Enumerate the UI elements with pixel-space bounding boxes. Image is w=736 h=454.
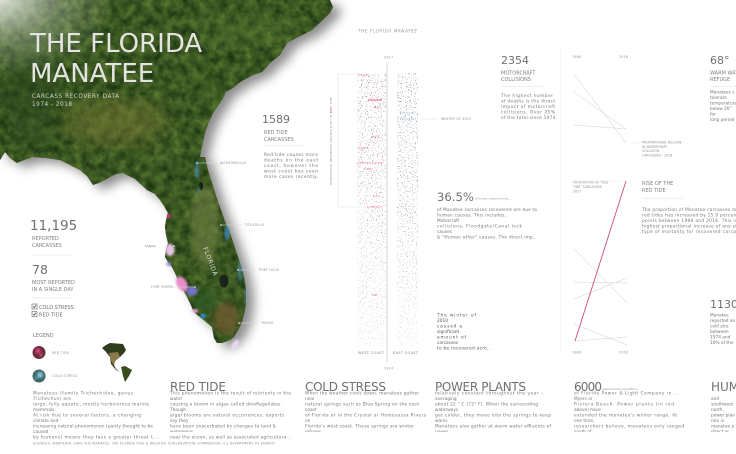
divider between stats and slopegraphs — [560, 45, 562, 355]
subtitle: CARCASS RECOVERY DATA — [32, 94, 119, 100]
chart: decline in watercraft slopegraph: COLLISION — [642, 149, 660, 153]
section: 6000: one time, — [574, 418, 594, 424]
section: cold stress: near — [305, 396, 315, 402]
text: rise of the red tide — [641, 181, 736, 235]
annotation: increasing red tide deaths bracket: INCREASING REPORTED DEATHS DUE TO RED TIDE — [329, 97, 333, 185]
stat: cold stress deaths: 10% of the — [710, 340, 734, 346]
map labels — [144, 161, 279, 325]
section: red tide: RED TIDE — [170, 380, 226, 394]
stat: red tide carcasses: Red tide causes more — [264, 152, 318, 158]
section: power plants: get colder, they move into the springs to keep — [435, 412, 551, 418]
small page heading: THE FLORIDA MANATEE — [358, 28, 417, 34]
stat: red tide carcasses — [262, 113, 318, 180]
stat: motorcraft collisions: The highest number — [500, 93, 553, 99]
stat: human causes: & "Human other" causes. The direct imp.. — [437, 234, 536, 240]
section: power plants — [435, 380, 551, 435]
filter checkboxes: COLD STRESS — [39, 305, 74, 311]
section: 6000: 6000 — [574, 380, 602, 394]
stat: motorcraft collisions: of the total since 1974. — [501, 115, 557, 121]
section: 6000: Riviera Beach. Power plants (in red — [574, 402, 674, 408]
stat: red tide carcasses: deaths on the east — [264, 158, 318, 164]
title: THE FLORIDA — [29, 29, 202, 59]
stat: reported carcasses: REPORTED — [32, 236, 59, 242]
stat: most reported in a single day: MOST REPORTED — [32, 280, 75, 286]
section: power plants: power — [435, 429, 449, 435]
section: cold stress: of Florida or in the Crystal or Homosassa Rivers — [305, 412, 427, 418]
stat: cold stress deaths: between — [710, 329, 729, 335]
section: cold stress: Florida's west coast. These springs are winter — [305, 424, 414, 430]
stat: red tide carcasses: RED TIDE — [264, 130, 288, 136]
title: MANATEE — [30, 59, 154, 89]
map: southeastern United States and Florida — [0, 0, 340, 350]
chart: rise of red tide slopegraph: TIDE" CARCASSES — [572, 185, 602, 189]
stat: warm water refuge — [710, 54, 736, 123]
stat: warm water refuge: for — [710, 112, 716, 118]
map labels: FORT MYERS — [151, 285, 173, 289]
stat: cold stress deaths: cold stre — [710, 324, 729, 330]
section: 6000: researchers believe, manatees only ranged — [574, 424, 684, 430]
section: 6000: (approximate population) — [602, 387, 638, 391]
filter checkboxes: RED TIDE — [39, 312, 63, 318]
intro text: large, fully aquatic, mostly herbivorous marine — [33, 402, 149, 408]
intro text: climate and — [33, 418, 59, 424]
stat: human causes: collisions, Floodgate/Canal lock — [437, 224, 522, 230]
map labels: TITUSVILLE — [244, 223, 264, 227]
chart: decline in watercraft slopegraph: 2016 — [619, 55, 628, 59]
section: red tide: say they — [170, 418, 189, 424]
section: 6000: south of — [574, 429, 592, 435]
legend: COLD STRESS — [52, 374, 77, 378]
section: power plants: averaging — [435, 396, 457, 402]
section: human: power plan — [711, 412, 735, 418]
stat: human causes: of Manatee carcasses recovered are due to — [437, 207, 537, 213]
section: cold stress: refuges — [305, 429, 322, 435]
map labels: PORT LUCIE — [259, 268, 279, 272]
intro text: mammals. — [33, 407, 56, 413]
section: red tide: have been exacerbated by changes to land & — [170, 424, 277, 430]
section: 6000 — [574, 380, 684, 435]
stat: warm water refuge: long period — [710, 117, 735, 123]
intro text — [33, 390, 158, 440]
stat: reported carcasses: CARCASSES — [32, 243, 62, 249]
stat: motorcraft collisions: impact of motorcraft — [501, 104, 555, 110]
chart: decline in watercraft slopegraph — [572, 55, 682, 157]
legend — [32, 333, 77, 382]
text: winter of 2010 note: The winter of — [436, 312, 476, 318]
stat: motorcraft collisions: COLLISIONS — [501, 77, 531, 83]
stat: motorcraft collisions — [500, 54, 557, 121]
legend: RED TIDE — [52, 351, 69, 355]
stat: motorcraft collisions: 2354 — [501, 54, 529, 67]
chart: rise of red tide slopegraph: 1986 — [572, 350, 581, 354]
text: winter of 2010 note — [436, 312, 490, 352]
chart: daily carcass scatter by coast: 1974 — [384, 366, 393, 370]
intro text: caused — [33, 429, 49, 435]
text: winter of 2010 note: 2010 — [437, 318, 448, 324]
intro text: At risk due to several factors, a changing — [33, 412, 141, 418]
section: power plants: relatively constant throughout the year – — [435, 390, 543, 396]
annotation: increasing red tide deaths bracket — [329, 74, 357, 207]
map labels: JACKSONVILLE — [219, 161, 246, 165]
stat: most reported in a single day: IN A SINGLE DAY — [32, 287, 74, 293]
chart: daily carcass scatter by coast: WEST COAST — [358, 351, 385, 355]
chart: decline in watercraft slopegraph: CARCASSES - 2016 — [642, 153, 672, 157]
stat: motorcraft collisions: collisions. Over 25% — [501, 110, 555, 116]
text: rise of the red tide: RED TIDE — [642, 188, 666, 194]
stat: motorcraft collisions: of deaths is the direct — [501, 98, 555, 104]
chart: rise of red tide slopegraph: 2016 — [619, 350, 628, 354]
map labels: FLORIDA — [201, 246, 219, 277]
stat: motorcraft collisions: MOTORCRAFT — [501, 70, 536, 76]
stat: warm water refuge: tolerate — [710, 95, 727, 101]
section: 6000: of Florida Power & Light Company in ... — [574, 390, 679, 396]
map labels: TAMPA — [144, 244, 156, 248]
section: cold stress: coast — [305, 407, 317, 413]
chart: daily carcass scatter by coast: EAST COAST — [393, 351, 419, 355]
text: winter of 2010 note: amount of — [437, 334, 466, 340]
chart: daily carcass scatter by coast — [357, 56, 419, 370]
stat: red tide carcasses: more cases recently. — [264, 174, 318, 180]
section: red tide: water — [170, 396, 182, 402]
sources: SOURCES: WIKIPEDIA, SAVE THE MANATEE, THE FLORIDA FISH & WILDLIFE CONSERVATION COMMISSION, U.S DEPARTMENT OF ENERGY — [33, 442, 276, 446]
intro text: increasing natural phenomenon (partly thought to be — [33, 424, 153, 430]
chart: daily carcass scatter by coast: 2017 — [384, 56, 393, 60]
section: red tide — [169, 380, 291, 440]
section: cold stress — [305, 380, 427, 435]
stat: warm water refuge: REFUGE — [710, 77, 730, 83]
stat: most reported in a single day — [32, 262, 75, 298]
stat: human causes: Motorcraft — [437, 218, 460, 224]
section: red tide: Though — [169, 407, 186, 413]
stat: human causes: human causes. This includes, — [437, 212, 506, 218]
stat: red tide carcasses: west coast has seen — [264, 168, 318, 174]
section: power plants: waterways — [435, 407, 459, 413]
stat: warm water refuge: 68° — [710, 54, 730, 67]
section: red tide: causing a bloom in algae called dinoflagellates. — [170, 402, 282, 408]
annotation: winter of 2010: WINTER OF 2010 — [441, 117, 471, 121]
section: human: and — [711, 396, 719, 402]
section: 6000: Myers or — [574, 396, 593, 402]
section: human — [711, 380, 736, 435]
stat: human causes: of known cause of mort... — [475, 196, 511, 200]
section: human: manatee p — [711, 424, 735, 430]
section: power plants: warm. — [435, 418, 448, 424]
icon: americas globe map — [102, 343, 132, 382]
chart: decline in watercraft slopegraph: IN WATERCRAFT — [642, 145, 668, 149]
map labels: MIAMI — [262, 321, 273, 325]
text: rise of the red tide: RISE OF THE — [642, 181, 673, 187]
stat: cold stress deaths: reported an — [710, 318, 735, 324]
stat: warm water refuge: Manatees s — [710, 90, 735, 96]
section: power plants: about 22 ° C (72° F). When the surrounding — [435, 402, 538, 408]
legend: LEGEND — [33, 333, 54, 339]
stat: cold stress deaths — [710, 298, 736, 346]
section: red tide: near the ocean, as well as associated agricultura... — [170, 434, 291, 440]
stat: cold stress deaths: Manatee — [710, 312, 729, 318]
section: cold stress: natural springs such as Blue Spring on the east — [305, 402, 419, 408]
stat: human causes: 36.5% — [437, 190, 474, 204]
red tide and cold stress glow along the coast — [166, 161, 248, 352]
chart: decline in watercraft slopegraph: 1986 — [572, 55, 581, 59]
text: winter of 2010 note: to be recovered acro.. — [437, 346, 490, 352]
stat: human causes — [437, 190, 537, 240]
text: winter of 2010 note: significant — [437, 329, 460, 335]
chart: rise of red tide slopegraph — [572, 180, 628, 354]
stat: cold stress deaths: 1974 and — [710, 334, 731, 340]
intro text: by humans) means they face a greater threat t... — [33, 434, 158, 440]
text: winter of 2010 note: caused a — [437, 324, 462, 330]
chart: rise of red tide slopegraph: PROPORTION OF "RED — [573, 180, 609, 184]
stat: red tide carcasses: 1589 — [262, 113, 290, 126]
section: 6000: extended the manatee's winter range. At — [574, 412, 677, 418]
subtitle — [32, 94, 119, 108]
stat: warm water refuge: below 20° — [710, 106, 732, 112]
annotation: winter of 2010 — [420, 117, 471, 121]
stat: reported carcasses: 11,195 — [30, 218, 77, 234]
section: 6000: above) have — [574, 407, 601, 413]
section: human: north, — [711, 407, 724, 413]
title — [29, 29, 202, 89]
text: winter of 2010 note: carcasses — [437, 340, 459, 346]
section: power plants: POWER PLANTS — [435, 380, 526, 394]
section: cold stress: When the weather cools down, manatees gather — [305, 390, 419, 396]
section: human: direct or — [711, 429, 729, 435]
stat: red tide carcasses: CARCASSES — [264, 137, 294, 143]
section: red tide: algal blooms are natural occurrences, experts — [170, 412, 285, 418]
stat: red tide carcasses: coast, however the — [264, 163, 318, 169]
filter checkboxes — [32, 304, 74, 318]
section: cold stress: COLD STRESS — [305, 380, 386, 394]
chart: decline in watercraft slopegraph: PROPORTIONAL DECLINE — [642, 140, 682, 144]
section: cold stress: on — [305, 419, 311, 424]
stat: most reported in a single day: 78 — [32, 262, 48, 277]
stat: human causes: causes — [437, 230, 453, 235]
section: red tide: This phenomenon is the result of nutrients in the — [169, 390, 291, 396]
section: human: southwest — [711, 402, 733, 408]
section: human: role in — [711, 418, 725, 424]
chart: rise of red tide slopegraph: 2017 — [573, 190, 581, 194]
stat: reported carcasses — [30, 218, 77, 255]
section: red tide: waterways — [170, 429, 194, 435]
intro text: Manatees (family Trichechidae, genus — [33, 390, 134, 396]
section: power plants: Manatees also gather at warm water effluents of — [435, 424, 551, 430]
subtitle: 1974 - 2018 — [32, 102, 72, 108]
intro text: Trichechus) are — [33, 396, 71, 402]
